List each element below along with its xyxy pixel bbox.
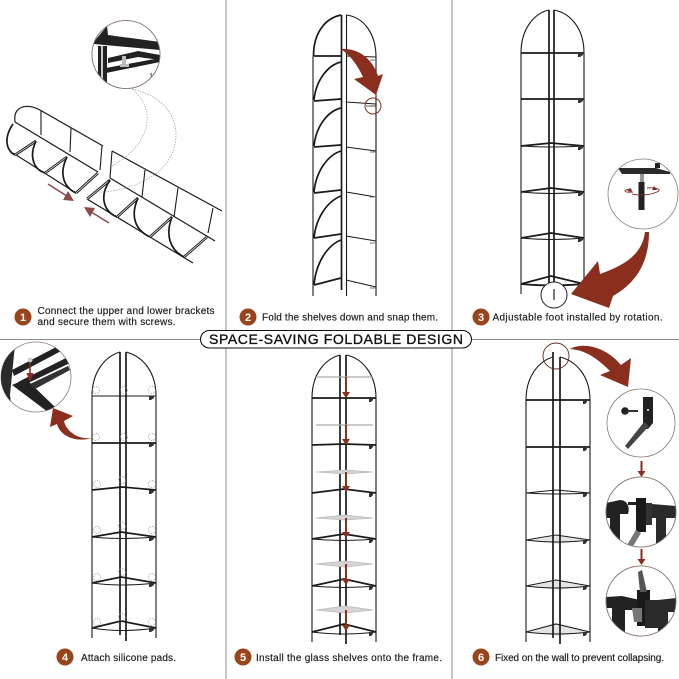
detail circle: pad on corner (1, 342, 72, 412)
step 2 badge: 2 (245, 312, 251, 324)
large curved arrow (571, 232, 649, 308)
step 5 caption: Install the glass shelves onto the frame. (256, 653, 442, 664)
panel: step 4 (1, 342, 176, 666)
step 1 caption: Connect the upper and lower brackets (38, 306, 214, 317)
step 3 badge (472, 308, 490, 326)
banner: SPACE-SAVING FOLDABLE DESIGN (209, 331, 463, 347)
red arrows: push together (48, 184, 109, 223)
glass shelves (316, 377, 373, 613)
detail circle: bracket on frame (606, 477, 676, 548)
panel: step 1 (7, 20, 222, 328)
foot circle marker (541, 282, 567, 308)
down arrows (342, 377, 350, 631)
step 6 badge: 6 (478, 652, 484, 664)
folded frame (7, 106, 222, 263)
panel: step 6 (472, 343, 676, 666)
step 2 badge (240, 308, 256, 326)
dotted leader lines (98, 89, 176, 192)
panel: step 3 (472, 10, 678, 326)
curved arrow (570, 346, 631, 387)
step 3 caption: Adjustable foot installed by rotation. (492, 312, 662, 324)
top circle marker (543, 343, 569, 369)
step 6 caption: Fixed on the wall to prevent collapsing. (495, 653, 664, 664)
step 1 badge (14, 308, 32, 326)
step 4 caption: Attach silicone pads. (81, 653, 176, 664)
step 5 badge (234, 648, 252, 666)
frame with glass (526, 352, 590, 644)
panel: step 5 (234, 355, 442, 666)
step 5 badge: 5 (240, 652, 246, 664)
assembled frame (521, 10, 584, 294)
frame (312, 355, 376, 644)
curved arrow (50, 408, 92, 440)
detail circle: tie fixed (606, 566, 676, 640)
half-folded frame (313, 15, 376, 296)
step 1 badge: 1 (20, 312, 26, 324)
silicone pad markers (92, 386, 156, 626)
detail circle: adjustable foot (608, 159, 678, 229)
frame with pads (92, 352, 156, 641)
step 3 badge: 3 (478, 312, 484, 324)
detail circle: bracket and screw (607, 389, 675, 457)
small arrow (638, 549, 646, 565)
step 4 badge (56, 648, 74, 666)
step 1 caption: and secure them with screws. (38, 317, 176, 328)
detail circle: screw joint (92, 20, 160, 88)
step 2 caption: Fold the shelves down and snap them. (262, 312, 438, 324)
curved arrow (341, 49, 383, 95)
panel: step 2 (240, 15, 438, 326)
step 4 badge: 4 (62, 652, 69, 664)
small arrow (638, 461, 646, 477)
snap circle marker (365, 98, 381, 114)
step 1 caption (38, 306, 214, 328)
step 6 badge (472, 648, 490, 666)
